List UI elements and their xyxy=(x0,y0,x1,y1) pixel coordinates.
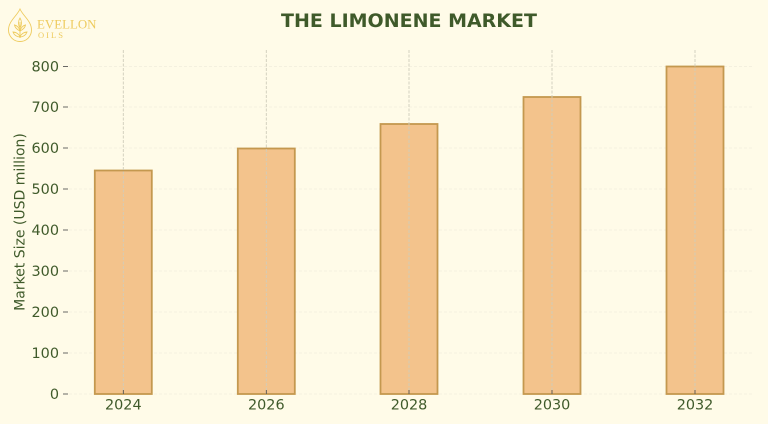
y-axis labels: 700 xyxy=(32,100,59,116)
x-axis labels: 2030 xyxy=(534,398,570,414)
title: THE LIMONENE MARKET xyxy=(281,10,537,32)
bar: 2030 xyxy=(524,97,580,394)
x-axis labels: 2028 xyxy=(391,398,427,414)
x-axis labels: 2032 xyxy=(677,398,713,414)
icon: oil drop with leaves xyxy=(8,9,32,42)
y-axis labels: 500 xyxy=(32,182,59,198)
x-axis labels xyxy=(105,398,713,414)
logo: Evellon Oils xyxy=(8,9,96,42)
y-axis tick marks xyxy=(63,66,68,394)
x-axis labels: 2026 xyxy=(248,398,285,414)
x-axis tick marks xyxy=(123,390,695,394)
bar: 2028 xyxy=(380,124,438,394)
y-axis labels: 100 xyxy=(32,346,59,362)
logo subtext: OILS xyxy=(38,30,63,40)
vertical grid lines xyxy=(123,50,695,394)
x-axis labels: 2024 xyxy=(105,398,142,414)
bar: 2032 xyxy=(666,66,724,394)
bar: 2026 xyxy=(238,148,295,394)
y-axis labels: 0 xyxy=(50,387,59,403)
y-axis labels: 600 xyxy=(32,141,59,157)
y-axis labels xyxy=(32,60,59,403)
horizontal grid lines xyxy=(69,66,752,394)
logo wordmark: EVELLON xyxy=(37,18,96,32)
bar chart xyxy=(95,66,724,394)
y-axis labels: 400 xyxy=(32,223,59,239)
y-axis title: Market Size (USD million) xyxy=(12,133,28,311)
y-axis labels: 200 xyxy=(32,305,59,321)
y-axis labels: 800 xyxy=(32,60,59,76)
y-axis labels: 300 xyxy=(32,264,59,280)
bar: 2024 xyxy=(95,170,152,394)
